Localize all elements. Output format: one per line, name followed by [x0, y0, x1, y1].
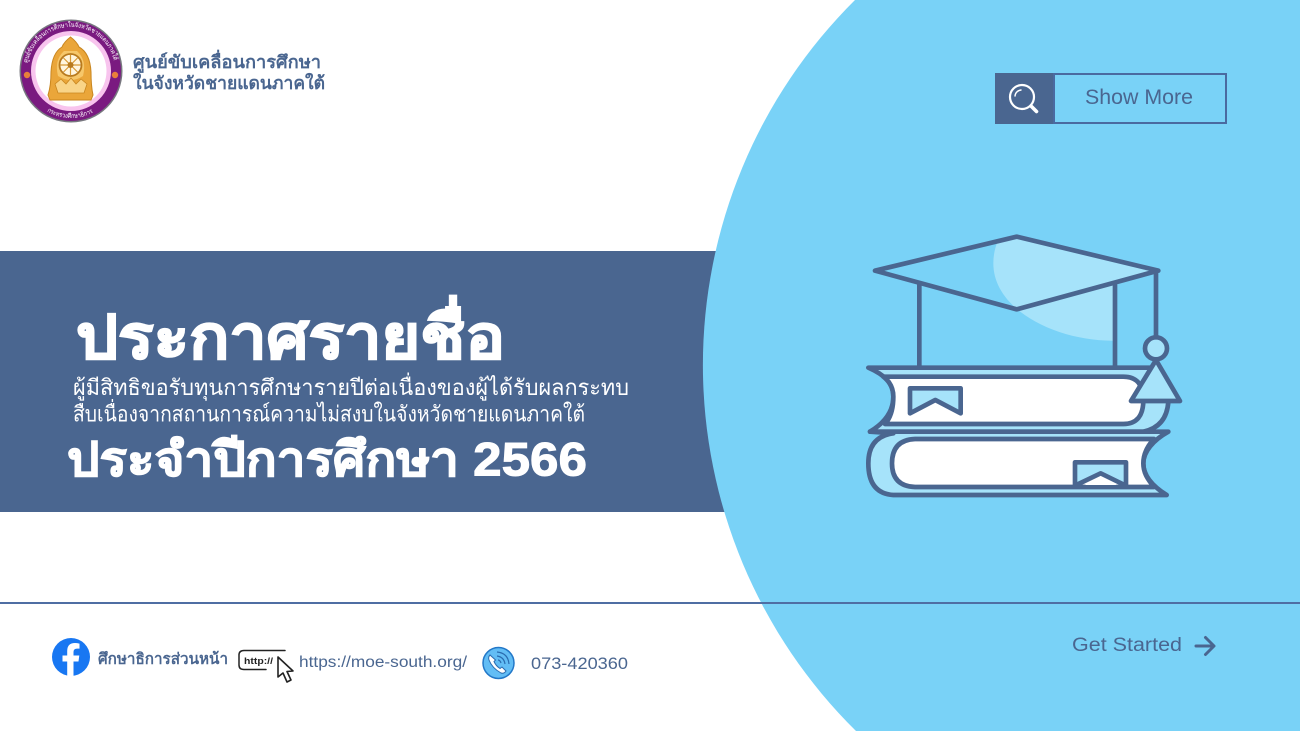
sub heading: ผู้มีสิทธิขอรับทุนการศึกษารายปีต่อเนื่องของผู้ได้รับผลกระทบ — [73, 372, 629, 401]
website url: https://moe-south.org/ — [299, 654, 468, 671]
button label: Show More — [1085, 86, 1193, 109]
icon: web address cursor: http:// — [244, 656, 273, 667]
academic year heading: ประจำปีการศึกษา 2566 — [67, 432, 587, 486]
light blue circle panel — [703, 0, 1300, 731]
icon: graduation cap on books — [868, 237, 1180, 495]
sub heading — [73, 372, 629, 426]
get started link — [1072, 635, 1214, 656]
footer divider — [0, 602, 1300, 604]
icon: web address cursor — [239, 650, 293, 682]
phone number: 073-420360 — [531, 654, 628, 673]
logo emblem: ศูนย์ขับเคลื่อนการศึกษาในจังหวัดชายแดนภาคใต้ — [24, 21, 119, 62]
icon: phone — [483, 648, 514, 678]
organisation name: ในจังหวัดชายแดนภาคใต้ — [133, 72, 325, 93]
sub heading: สืบเนื่องจากสถานการณ์ความไม่สงบในจังหวัดชายแดนภาคใต้ — [73, 398, 585, 426]
title band — [0, 251, 760, 512]
top book — [868, 368, 1168, 432]
logo emblem: กระทรวงศึกษาธิการ — [48, 108, 92, 118]
logo emblem — [20, 20, 122, 122]
cap — [875, 237, 1158, 368]
icon: search — [1010, 85, 1036, 112]
main heading: ประกาศรายชื่อ — [76, 295, 505, 371]
icon: arrow — [1196, 638, 1214, 654]
show more button — [995, 73, 1226, 124]
get started link: Get Started — [1072, 635, 1182, 656]
tassel — [1131, 271, 1180, 401]
bottom book — [868, 432, 1168, 495]
organisation name — [133, 49, 325, 93]
organisation name: ศูนย์ขับเคลื่อนการศึกษา — [133, 49, 321, 74]
facebook page name: ศึกษาธิการส่วนหน้า — [98, 650, 228, 668]
icon: facebook — [52, 638, 90, 676]
